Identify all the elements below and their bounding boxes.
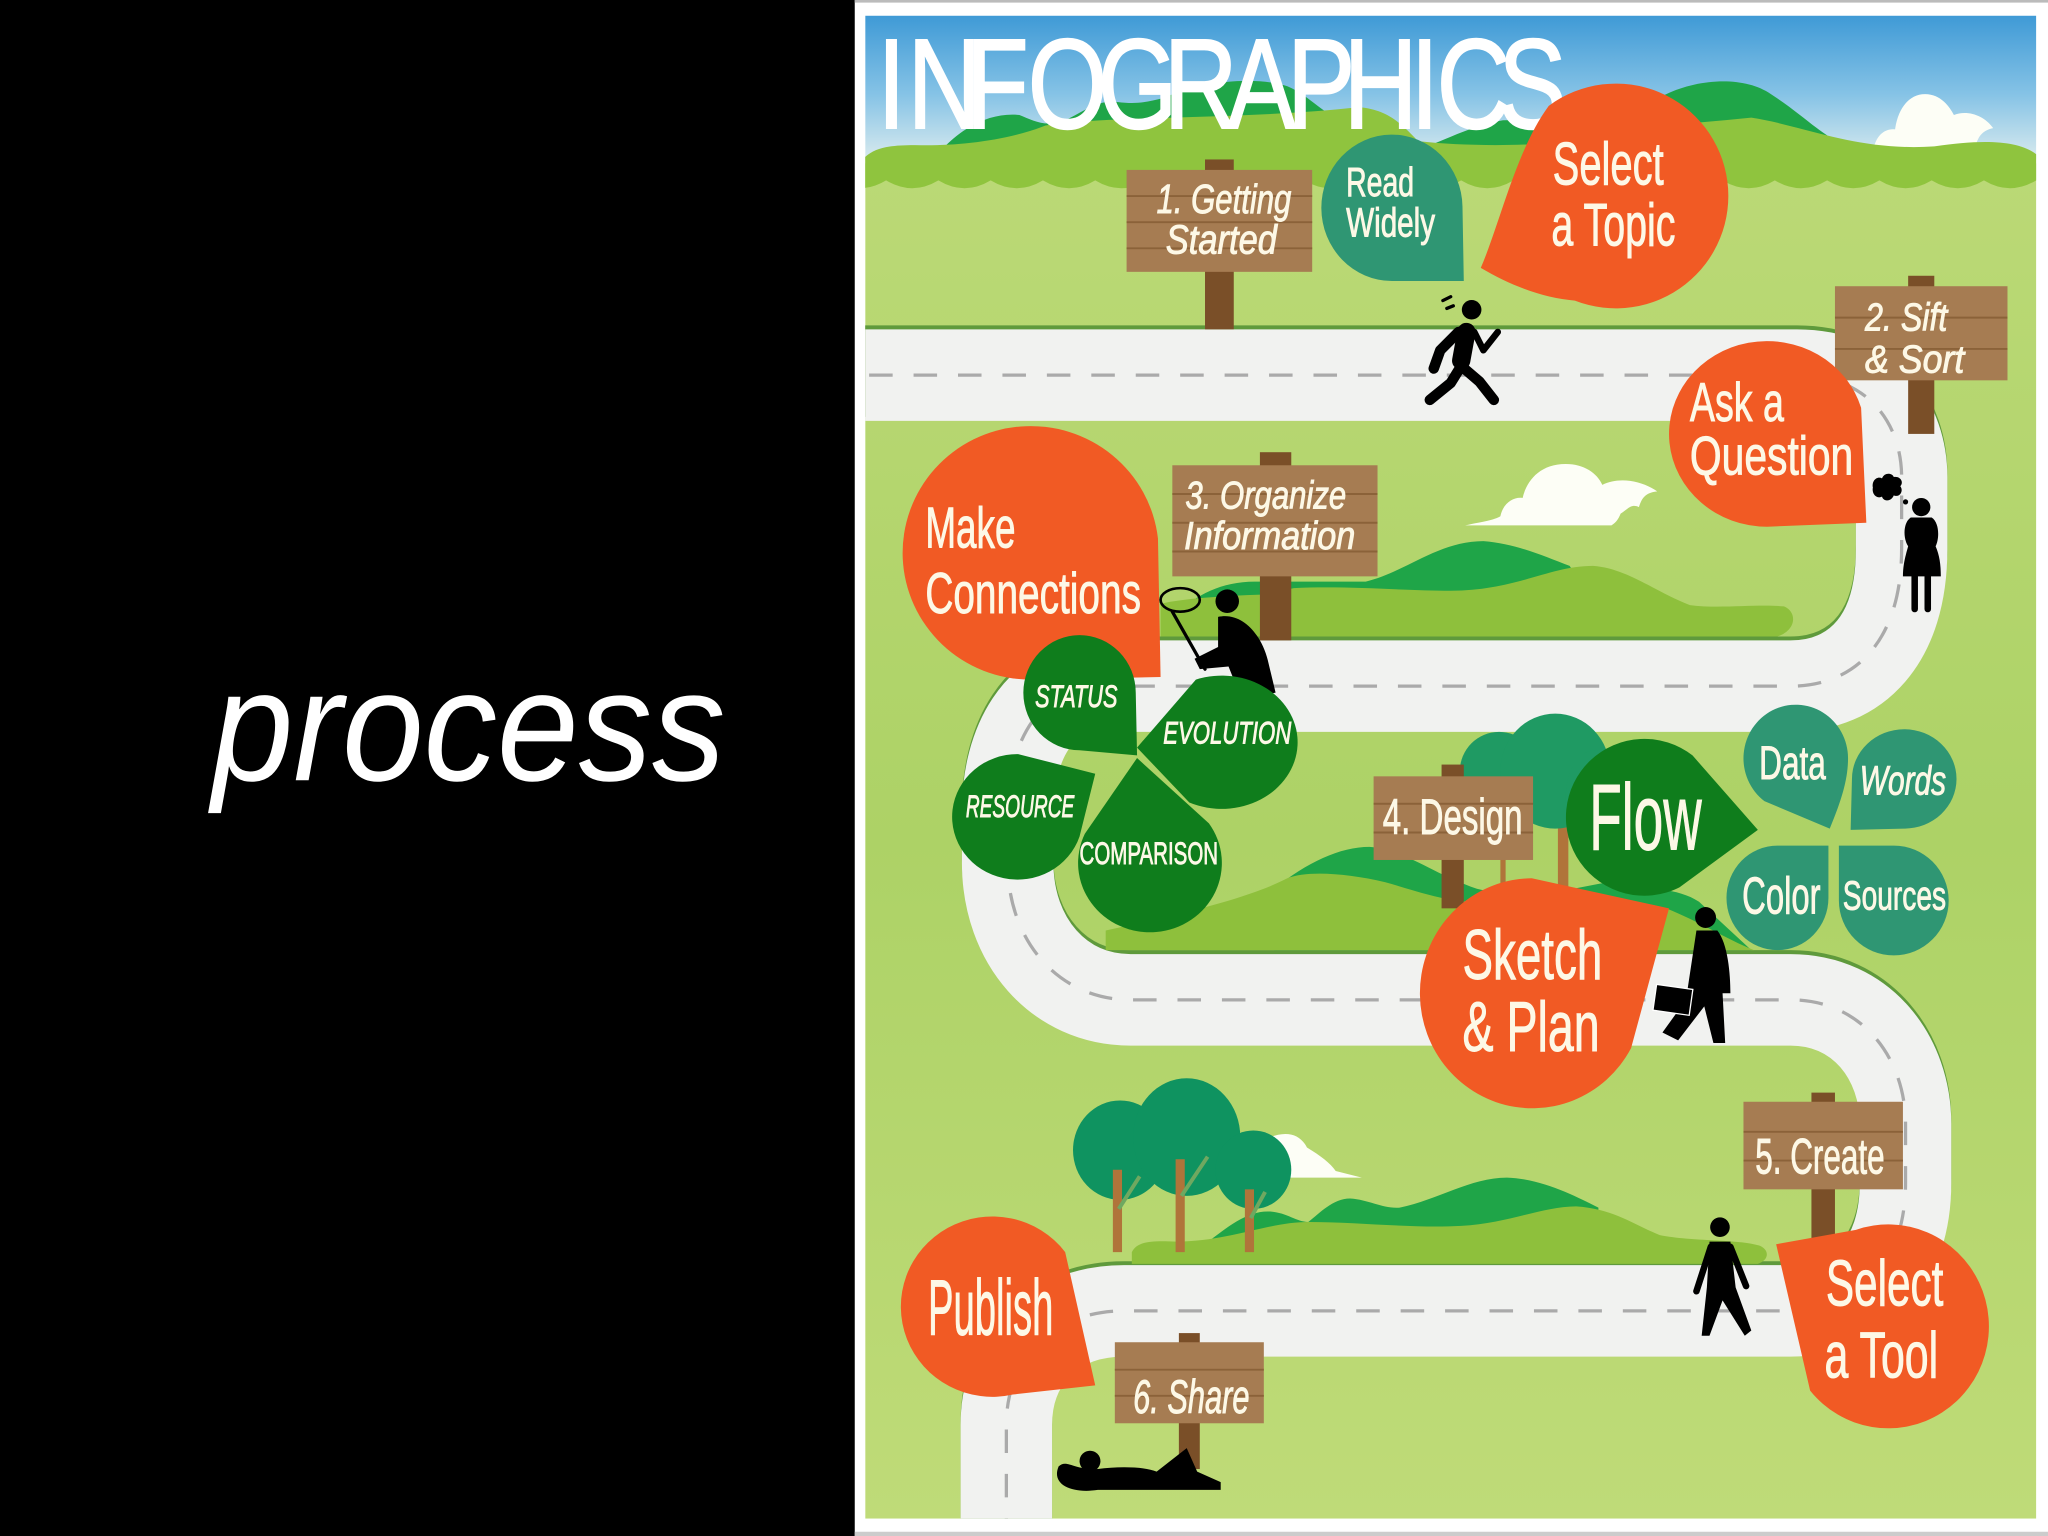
petal: Words: Words: [1860, 758, 1946, 804]
petal: COMPARISON: [1078, 758, 1222, 932]
bubble: Select a Topic: Select: [1553, 130, 1664, 197]
bubble: Ask a Question: Ask a: [1690, 371, 1784, 433]
petal: Data: Data: [1759, 736, 1826, 789]
petal: Words: [1851, 729, 1957, 830]
bubble: Read Widely: Read: [1346, 159, 1414, 205]
sign: 5. Create: [1743, 1093, 1903, 1242]
sign: 2. Sift and Sort: 2. Sift: [1864, 297, 1949, 340]
bubble: Make Connections: Make: [925, 497, 1016, 561]
figure: person with net: [1161, 588, 1276, 699]
ground: [865, 163, 2036, 1519]
cloud: top right: [1874, 94, 1993, 148]
bubble: Sketch and Plan: [1420, 878, 1669, 1108]
bubble: Flow: Flow: [1589, 765, 1702, 870]
petal: Color: [1726, 846, 1828, 950]
petal: Sources: [1839, 846, 1949, 955]
petal: COMPARISON: COMPARISON: [1080, 836, 1218, 871]
cloud: middle: [1465, 464, 1657, 525]
bubble: Read Widely: [1321, 135, 1464, 281]
sign: 3. Organize Information: 3. Organize: [1185, 474, 1346, 517]
petal: Sources: Sources: [1843, 873, 1946, 919]
background hills: [946, 81, 1828, 146]
sign: 1. Getting Started: Started: [1166, 217, 1278, 263]
bubble: Make Connections: Connections: [925, 562, 1141, 626]
bubble: Sketch and Plan: Sketch: [1462, 915, 1602, 994]
bubble: Read Widely: Widely: [1346, 200, 1436, 246]
poster scene background: [834, 16, 2036, 1529]
title: INFOGRAPHICS: [877, 12, 1567, 156]
mid hills: [1161, 541, 1793, 636]
petal group: design elements: [1726, 705, 1957, 955]
bubble: Flow: [1566, 739, 1758, 896]
figure: resting person: [1057, 1448, 1221, 1491]
bubble: Publish: Publish: [928, 1263, 1053, 1351]
lower-mid trees: [1460, 714, 1606, 886]
petal: Color: Color: [1742, 868, 1821, 926]
bubble: Select a Topic: a Topic: [1551, 192, 1676, 259]
sign: 2. Sift and Sort: & Sort: [1865, 338, 1966, 381]
petal: STATUS: [1023, 635, 1137, 755]
bubble: Publish: [901, 1216, 1095, 1397]
petal: STATUS: STATUS: [1035, 679, 1117, 714]
sign: 3. Organize Information: Information: [1184, 515, 1355, 558]
bubble: Ask a Question: [1669, 341, 1866, 527]
sign: 6. Share: [1115, 1333, 1264, 1469]
figure: person with briefcase: [1653, 907, 1730, 1043]
road: [850, 371, 1906, 1529]
bubble: Make Connections: [903, 426, 1161, 680]
figure: running person: [1430, 297, 1498, 400]
figure: thinking woman: [1873, 474, 1941, 609]
bubble: Ask a Question: Question: [1690, 424, 1853, 486]
petal: RESOURCE: RESOURCE: [966, 789, 1075, 824]
sign: 1. Getting Started: [1127, 159, 1312, 329]
sign: 4. Design: 4. Design: [1383, 789, 1523, 845]
sign: 1. Getting Started: 1. Getting: [1157, 176, 1292, 222]
bubble: Select a Tool: Select: [1826, 1247, 1943, 1320]
sign: 5. Create: 5. Create: [1755, 1129, 1885, 1185]
sign: 3. Organize Information: [1172, 452, 1378, 640]
petal: EVOLUTION: EVOLUTION: [1163, 716, 1292, 751]
sign: 2. Sift and Sort: [1835, 276, 2007, 434]
sign: 6. Share: 6. Share: [1133, 1370, 1249, 1423]
lower-mid hills: [1106, 847, 1754, 950]
figure: walking person: [1696, 1217, 1751, 1336]
bubble: Sketch and Plan: & Plan: [1462, 987, 1600, 1066]
petal: Data: [1743, 705, 1848, 829]
bubble: Select a Topic: [1481, 84, 1728, 308]
slide word: process: process: [208, 637, 725, 814]
scalloped green band: [834, 107, 2036, 188]
bubble: Select a Tool: a Tool: [1825, 1319, 1938, 1392]
lower left trees and cloud: [1073, 1078, 1362, 1252]
lower hills: [1132, 1178, 1767, 1264]
bubble: Select a Tool: [1776, 1224, 1989, 1428]
petal group: infographic types: [952, 635, 1298, 932]
sign: 4. Design: [1374, 765, 1533, 908]
poster frame: [855, 0, 2048, 1536]
petal: EVOLUTION: [1137, 676, 1298, 809]
petal: RESOURCE: [952, 754, 1095, 880]
